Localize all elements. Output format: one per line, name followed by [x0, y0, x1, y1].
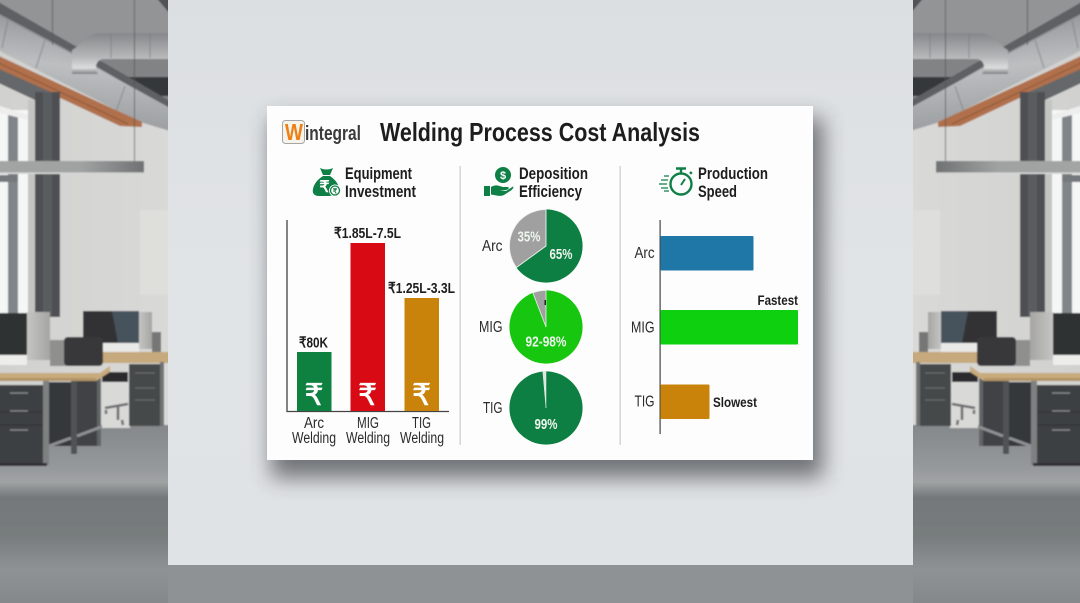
label: MIG: MIG — [631, 320, 654, 336]
annotation: fastest: Fastest — [758, 292, 798, 308]
label: arc: Arc — [634, 245, 655, 262]
heading: equipment investment — [345, 165, 416, 201]
heading: equipment investment: Investment — [345, 183, 416, 201]
pie: MIG — [509, 290, 583, 364]
bar: TIG speed — [660, 384, 710, 419]
axis label: MIG welding: MIG — [357, 415, 379, 432]
heading: production speed — [698, 165, 768, 201]
axis label: MIG welding: Welding — [346, 430, 390, 447]
bar: arc welding — [297, 352, 332, 412]
bar: TIG welding: ₹ — [412, 379, 431, 412]
pie: TIG — [509, 371, 583, 445]
background: right office scene — [910, 0, 1080, 603]
icon: stopwatch — [659, 168, 692, 194]
pie: TIG: 99% — [534, 416, 558, 433]
bar: MIG welding: ₹ — [358, 379, 377, 412]
heading: deposition efficiency — [519, 165, 588, 201]
bar: arc speed — [660, 236, 754, 270]
background: central wall — [168, 0, 913, 565]
bar: MIG welding — [350, 243, 385, 412]
panel: deposition efficiency — [479, 165, 588, 445]
axis label: TIG welding: Welding — [400, 430, 444, 447]
bar chart: equipment cost — [287, 220, 455, 447]
panel: infographic card — [267, 106, 813, 460]
bar: TIG welding — [404, 298, 439, 412]
axis label: MIG welding — [346, 415, 390, 447]
label: arc: Arc — [482, 238, 502, 255]
heading: production speed: Speed — [698, 183, 737, 201]
icon: money bag: ₹ — [333, 188, 338, 196]
axis label: arc welding — [292, 415, 336, 447]
icon: money bag — [313, 168, 341, 196]
pie: arc: 35% — [518, 228, 540, 246]
panel: production speed — [631, 165, 798, 434]
divider right — [620, 166, 621, 445]
logo: Wintegral: integral — [305, 123, 361, 145]
bar: MIG speed — [660, 310, 798, 344]
icon: money bag: ₹ — [319, 179, 330, 196]
label: TIG: TIG — [634, 394, 654, 410]
pie: arc: 65% — [550, 246, 572, 263]
logo: Wintegral: W — [285, 119, 303, 145]
axis label: arc welding: Arc — [304, 415, 324, 432]
bar: arc welding: ₹ — [304, 379, 324, 412]
value: TIG cost: ₹1.25L-3.3L — [388, 280, 455, 297]
heading: deposition efficiency: Efficiency — [519, 183, 583, 201]
axis label: TIG welding: TIG — [412, 415, 431, 432]
pie: MIG: 92-98% — [526, 334, 566, 350]
axis label: arc welding: Welding — [292, 430, 336, 447]
annotation: slowest: Slowest — [713, 394, 757, 410]
panel: equipment investment — [287, 165, 455, 447]
value: MIG cost: ₹1.85L-7.5L — [334, 225, 401, 242]
pie: arc — [509, 209, 583, 283]
value: arc cost: ₹80K — [299, 334, 328, 352]
heading: production speed: Production — [698, 165, 768, 183]
divider left — [460, 166, 461, 445]
label: MIG: MIG — [479, 319, 502, 336]
logo: Wintegral — [282, 119, 361, 145]
axis — [660, 220, 661, 434]
background: floor strip — [168, 565, 913, 603]
icon: hand with dollar coin: $ — [500, 170, 506, 182]
icon: hand with dollar coin — [484, 167, 513, 196]
heading: deposition efficiency: Deposition — [519, 165, 588, 183]
background: left office scene — [0, 0, 170, 603]
panel shadow — [271, 118, 823, 478]
title: Welding Process Cost Analysis — [380, 117, 700, 147]
axis label: TIG welding — [400, 415, 444, 447]
heading: equipment investment: Equipment — [345, 165, 412, 183]
label: TIG: TIG — [483, 400, 502, 417]
horizontal bar chart: speed — [631, 220, 798, 434]
